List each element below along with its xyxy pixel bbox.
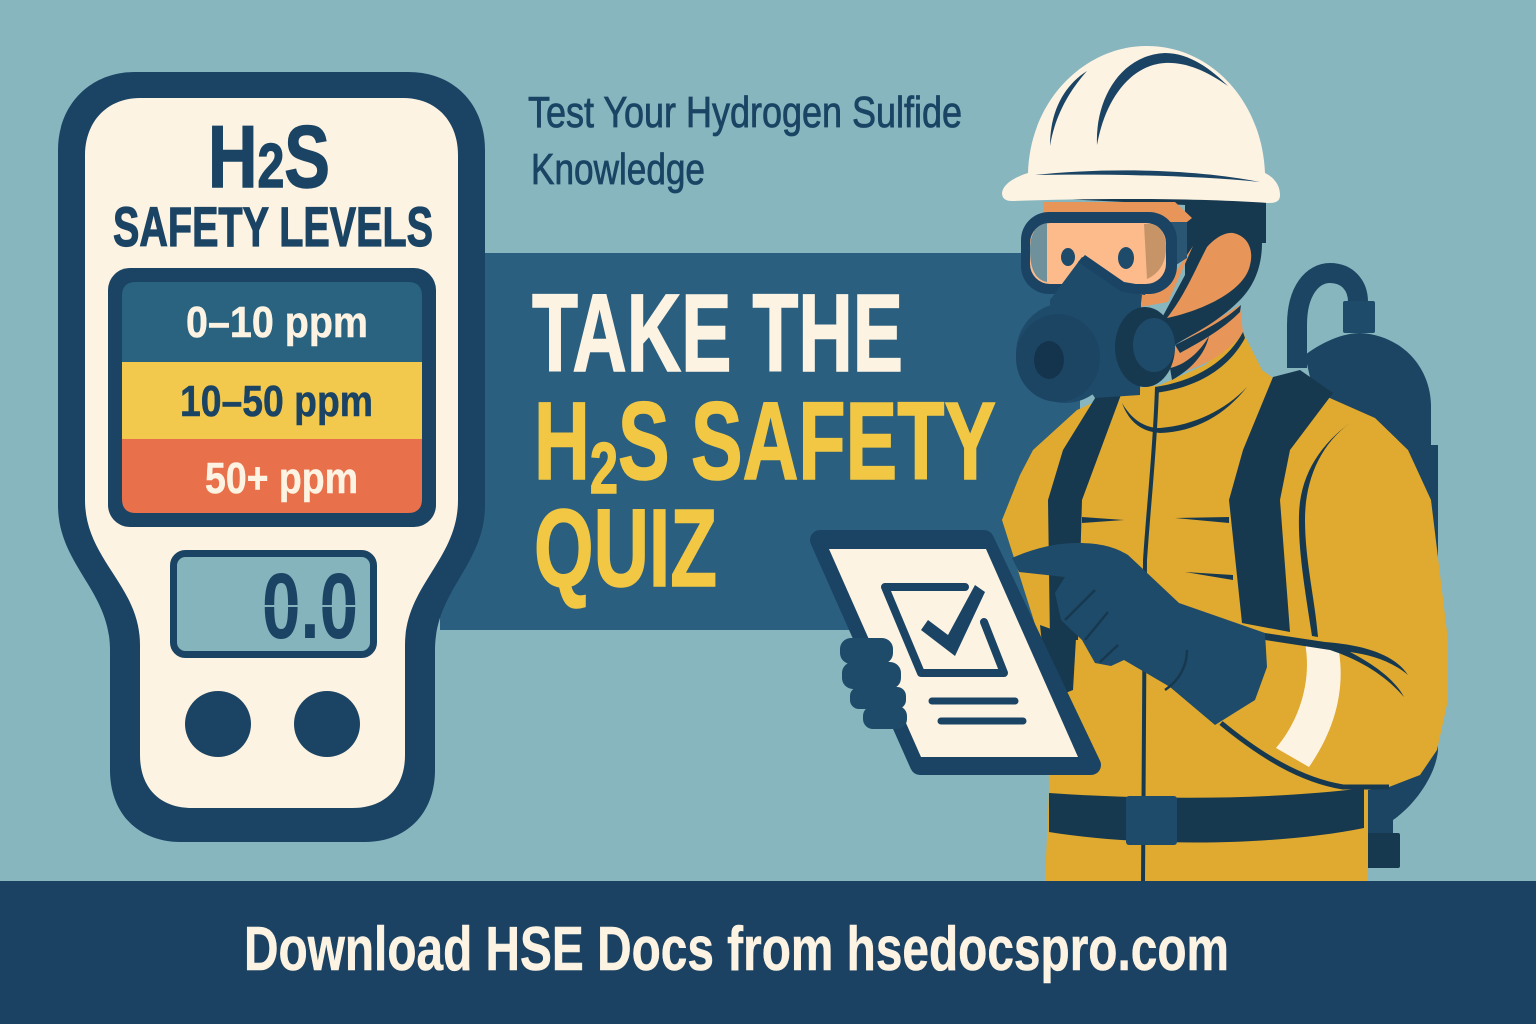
device heading: SAFETY LEVELS: [113, 195, 433, 258]
harness straps: [1048, 370, 1333, 640]
device heading: H2S: [208, 107, 330, 206]
air tank: [1297, 273, 1438, 868]
quiz title: TAKE THE: [532, 272, 903, 395]
checklist lines: [932, 701, 1023, 721]
worker illustration: [820, 46, 1448, 881]
check mark: [921, 585, 985, 656]
intro text: Knowledge: [531, 145, 705, 194]
intro text: Test Your Hydrogen Sulfide: [528, 88, 962, 137]
checkbox: [885, 587, 1004, 673]
quiz title: 2: [590, 429, 618, 509]
device face: [85, 98, 458, 808]
footer bar: [0, 881, 1536, 1024]
ppm levels panel: 10–50 ppm: [180, 377, 373, 426]
gloved pointing hand: [1012, 543, 1267, 725]
device heading: [113, 107, 433, 258]
suit: [1002, 332, 1448, 881]
quiz banner panel: [440, 253, 1080, 630]
quiz title: S SAFETY: [618, 380, 996, 503]
digital display: 0.0: [262, 554, 358, 658]
device body: [58, 72, 485, 842]
ppm levels panel: [108, 268, 436, 527]
intro text: [528, 88, 962, 194]
tablet with checklist: [820, 540, 1091, 765]
ppm levels panel: 0–10 ppm: [186, 298, 368, 347]
quiz title: H: [534, 380, 613, 503]
quiz title: QUIZ: [534, 487, 717, 610]
device buttons: [185, 691, 360, 757]
ppm levels panel: 50+ ppm: [205, 454, 358, 503]
left hand fingers: [840, 638, 907, 729]
footer bar: Download HSE Docs from hsedocspro.com: [244, 915, 1229, 984]
head and neck: [1043, 198, 1266, 393]
tablet shadow: [1040, 625, 1076, 700]
belt: [1049, 788, 1364, 845]
respirator mask: [1016, 255, 1175, 403]
goggles: [1021, 212, 1187, 294]
digital display: [174, 554, 374, 658]
safety helmet: [1002, 46, 1280, 203]
gas detector device: [58, 72, 485, 842]
quiz title: [532, 272, 996, 610]
